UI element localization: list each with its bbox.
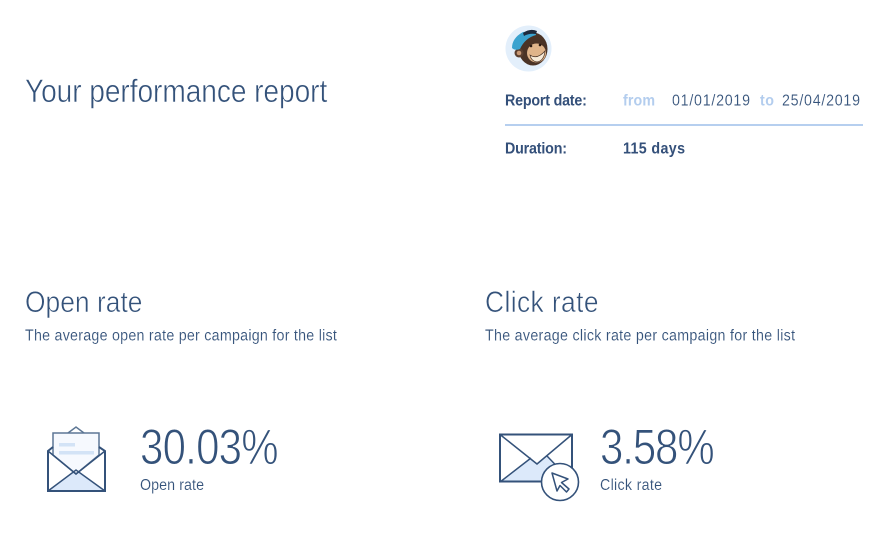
icon: envelope with cursor — [500, 434, 578, 500]
report date row — [505, 93, 860, 110]
duration label: Duration: — [505, 141, 567, 158]
report date label: Report date: — [505, 93, 587, 110]
click rate heading: Click rate — [485, 284, 599, 318]
open rate description: The average open rate per campaign for the list — [25, 328, 338, 345]
click rate description: The average click rate per campaign for the list — [485, 328, 796, 345]
from label: from — [623, 93, 655, 110]
start date: 01/01/2019 — [672, 93, 750, 110]
open rate heading: Open rate — [25, 284, 142, 318]
title: Your performance report — [25, 74, 328, 109]
panel: open rate — [25, 284, 338, 494]
end date: 25/04/2019 — [782, 93, 860, 110]
click rate value: 3.58% — [600, 419, 715, 475]
icon: monkey logo — [506, 26, 552, 72]
click rate label: Click rate — [600, 478, 662, 494]
duration value: 115 days — [623, 141, 685, 158]
open rate label: Open rate — [140, 478, 204, 494]
to label: to — [760, 93, 774, 110]
icon: open envelope — [48, 427, 105, 491]
duration row — [505, 141, 685, 158]
open rate value: 30.03% — [140, 419, 279, 475]
panel: click rate — [485, 284, 796, 500]
